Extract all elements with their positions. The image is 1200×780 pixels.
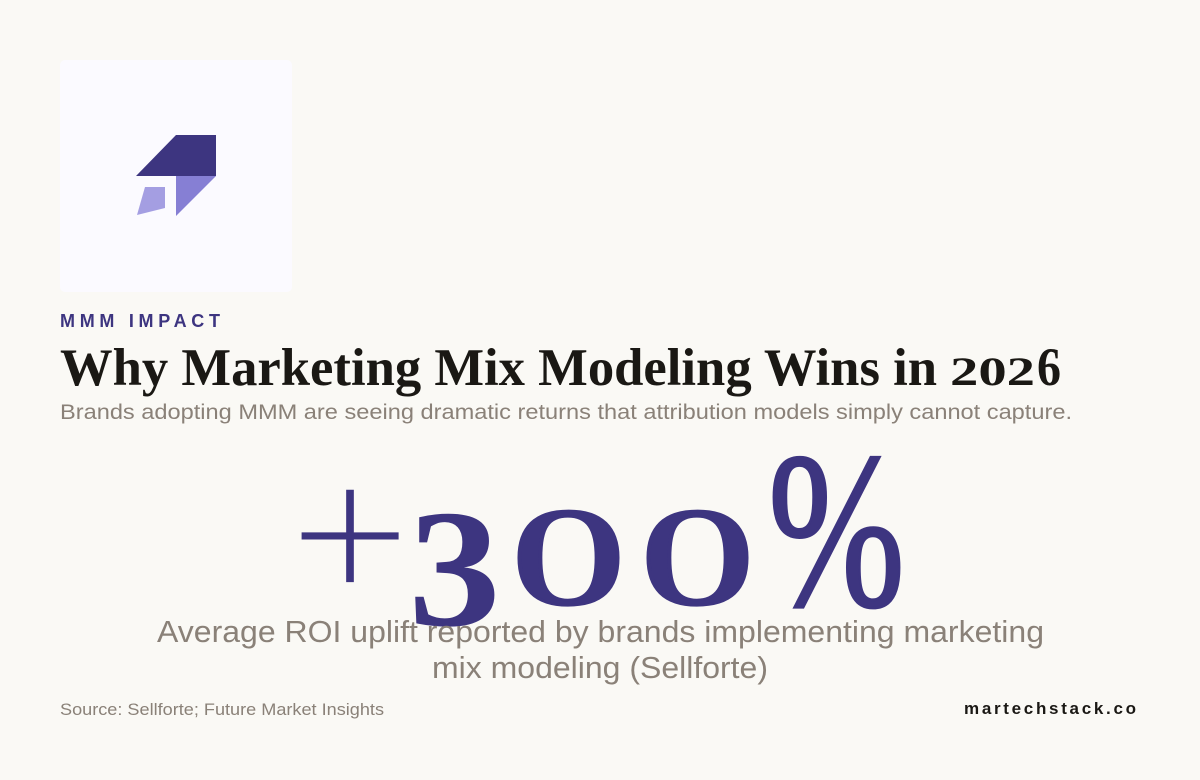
source note: Source: Sellforte; Future Market Insights [60,700,384,719]
eyebrow label: MMM IMPACT [60,311,220,331]
big stat: +300% [289,408,905,662]
brand url: martechstack.co [964,699,1136,718]
stat caption: mix modeling (Sellforte) [432,650,768,685]
title: 6 [1037,337,1061,397]
logo panel [60,60,292,292]
big stat: +300%: % [768,408,905,654]
stat caption [157,614,1044,685]
big stat: +300%: 3 [408,477,501,662]
title: Why Marketing Mix Modeling Wins in [60,339,937,397]
big stat: +300%: 0 [511,480,626,635]
big stat: +300%: 0 [640,480,755,635]
big stat: +300%: + [289,423,411,649]
icon: logo mark [136,135,216,216]
stat caption: Average ROI uplift reported by brands implementing marketing [157,614,1044,649]
subtitle: Brands adopting MMM are seeing dramatic returns that attribution models simply cannot capture. [60,401,1072,424]
title: 202 [950,349,1035,394]
